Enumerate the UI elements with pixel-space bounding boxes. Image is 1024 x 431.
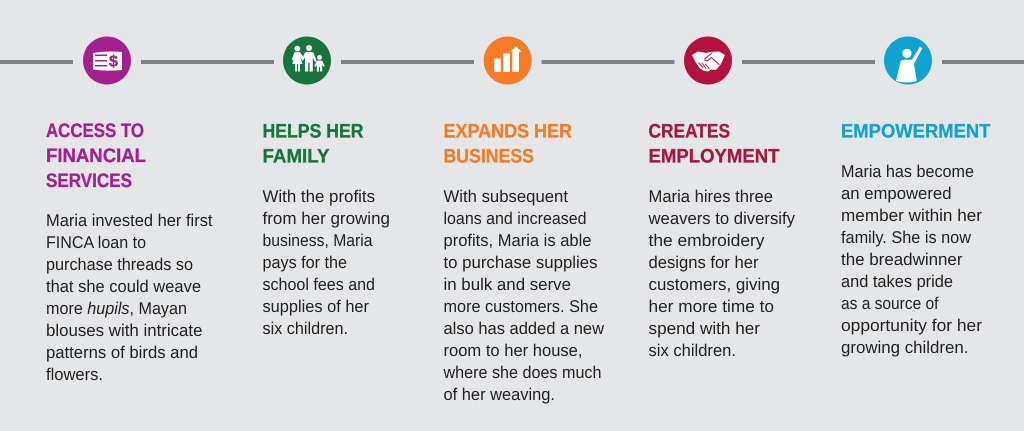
- text block: access to financial services: blouses with intricate: [46, 321, 202, 340]
- heading: helps her family: [262, 120, 364, 168]
- icon: handshake: [684, 36, 732, 84]
- text block: access to financial services: that she could weave: [46, 277, 201, 296]
- text block: access to financial services: flowers.: [46, 365, 103, 384]
- text block: creates employment: spend with her: [648, 319, 760, 338]
- text block: creates employment: six children.: [648, 341, 736, 360]
- text block: access to financial services: patterns of birds and: [46, 343, 198, 362]
- text block: expands her business: room to her house,: [444, 341, 582, 360]
- text block: expands her business: to purchase supplies: [444, 253, 598, 272]
- text block: expands her business: also has added a new: [444, 319, 605, 338]
- heading: helps her family: FAMILY: [262, 146, 330, 168]
- icon: rising bar chart with arrow: [484, 36, 532, 84]
- icon: family: [283, 36, 331, 84]
- heading: access to financial services: [46, 120, 146, 192]
- icon: woman raising her arm: [884, 36, 932, 84]
- heading: creates employment: EMPLOYMENT: [648, 146, 780, 168]
- heading: creates employment: CREATES: [648, 120, 730, 142]
- text block: helps her family: from her growing: [262, 209, 390, 228]
- text block: helps her family: pays for the: [262, 253, 347, 272]
- heading: empowerment: EMPOWERMENT: [841, 120, 991, 142]
- text block: access to financial services: FINCA loan to: [46, 233, 146, 252]
- text block: helps her family: With the profits: [262, 187, 375, 206]
- icon: cheque with dollar sign: [83, 36, 131, 84]
- text block: expands her business: where she does much: [443, 363, 602, 382]
- heading: helps her family: HELPS HER: [262, 120, 364, 142]
- text block: expands her business: loans and increased: [444, 209, 586, 228]
- text block: empowerment: Maria has become: [841, 162, 974, 181]
- heading: expands her business: [444, 120, 572, 168]
- text block: helps her family: school fees and: [262, 275, 375, 294]
- text block: creates employment: customers, giving: [648, 275, 780, 294]
- text block: expands her business: With subsequent: [444, 187, 568, 206]
- icon: cheque with dollar sign: $: [109, 54, 118, 70]
- text block: access to financial services: Maria invested her first: [46, 211, 213, 230]
- text block: helps her family: six children.: [262, 319, 348, 338]
- text block: creates employment: weavers to diversify: [648, 209, 795, 228]
- text block: access to financial services: more hupils, Mayan: [46, 299, 187, 318]
- text block: empowerment: member within her: [841, 206, 982, 225]
- heading: access to financial services: FINANCIAL: [46, 145, 146, 167]
- heading: expands her business: BUSINESS: [444, 146, 534, 168]
- text block: empowerment: opportunity for her: [841, 316, 982, 335]
- text block: expands her business: in bulk and serve: [444, 275, 571, 294]
- text block: access to financial services: [46, 211, 213, 384]
- text block: helps her family: [262, 187, 390, 338]
- text block: expands her business: profits, Maria is able: [444, 231, 592, 250]
- panel: creates employment: [648, 120, 795, 360]
- text block: empowerment: growing children.: [841, 338, 968, 357]
- heading: expands her business: EXPANDS HER: [444, 120, 572, 142]
- text block: empowerment: [841, 162, 982, 357]
- heading: access to financial services: SERVICES: [46, 170, 132, 192]
- text block: creates employment: designs for her: [648, 253, 759, 272]
- text block: creates employment: the embroidery: [648, 231, 765, 250]
- text block: helps her family: business, Maria: [262, 231, 373, 250]
- text block: creates employment: her more time to: [648, 297, 774, 316]
- text block: empowerment: as a source of: [841, 294, 939, 313]
- text block: empowerment: the breadwinner: [841, 250, 963, 269]
- panel: expands her business: [443, 120, 605, 404]
- text block: creates employment: Maria hires three: [648, 187, 773, 206]
- text block: expands her business: [443, 187, 605, 404]
- text block: empowerment: and takes pride: [841, 272, 953, 291]
- text block: creates employment: [648, 187, 795, 360]
- panel: access to financial services: [46, 120, 213, 384]
- text block: expands her business: more customers. She: [444, 297, 598, 316]
- text block: empowerment: family. She is now: [841, 228, 972, 247]
- text block: empowerment: an empowered: [841, 184, 952, 203]
- heading: creates employment: [648, 120, 780, 168]
- text block: access to financial services: purchase threads so: [46, 255, 193, 274]
- text block: helps her family: supplies of her: [262, 297, 369, 316]
- heading: access to financial services: ACCESS TO: [46, 120, 144, 142]
- panel: helps her family: [262, 120, 390, 338]
- panel: empowerment: [841, 120, 991, 357]
- text block: expands her business: of her weaving.: [444, 385, 555, 404]
